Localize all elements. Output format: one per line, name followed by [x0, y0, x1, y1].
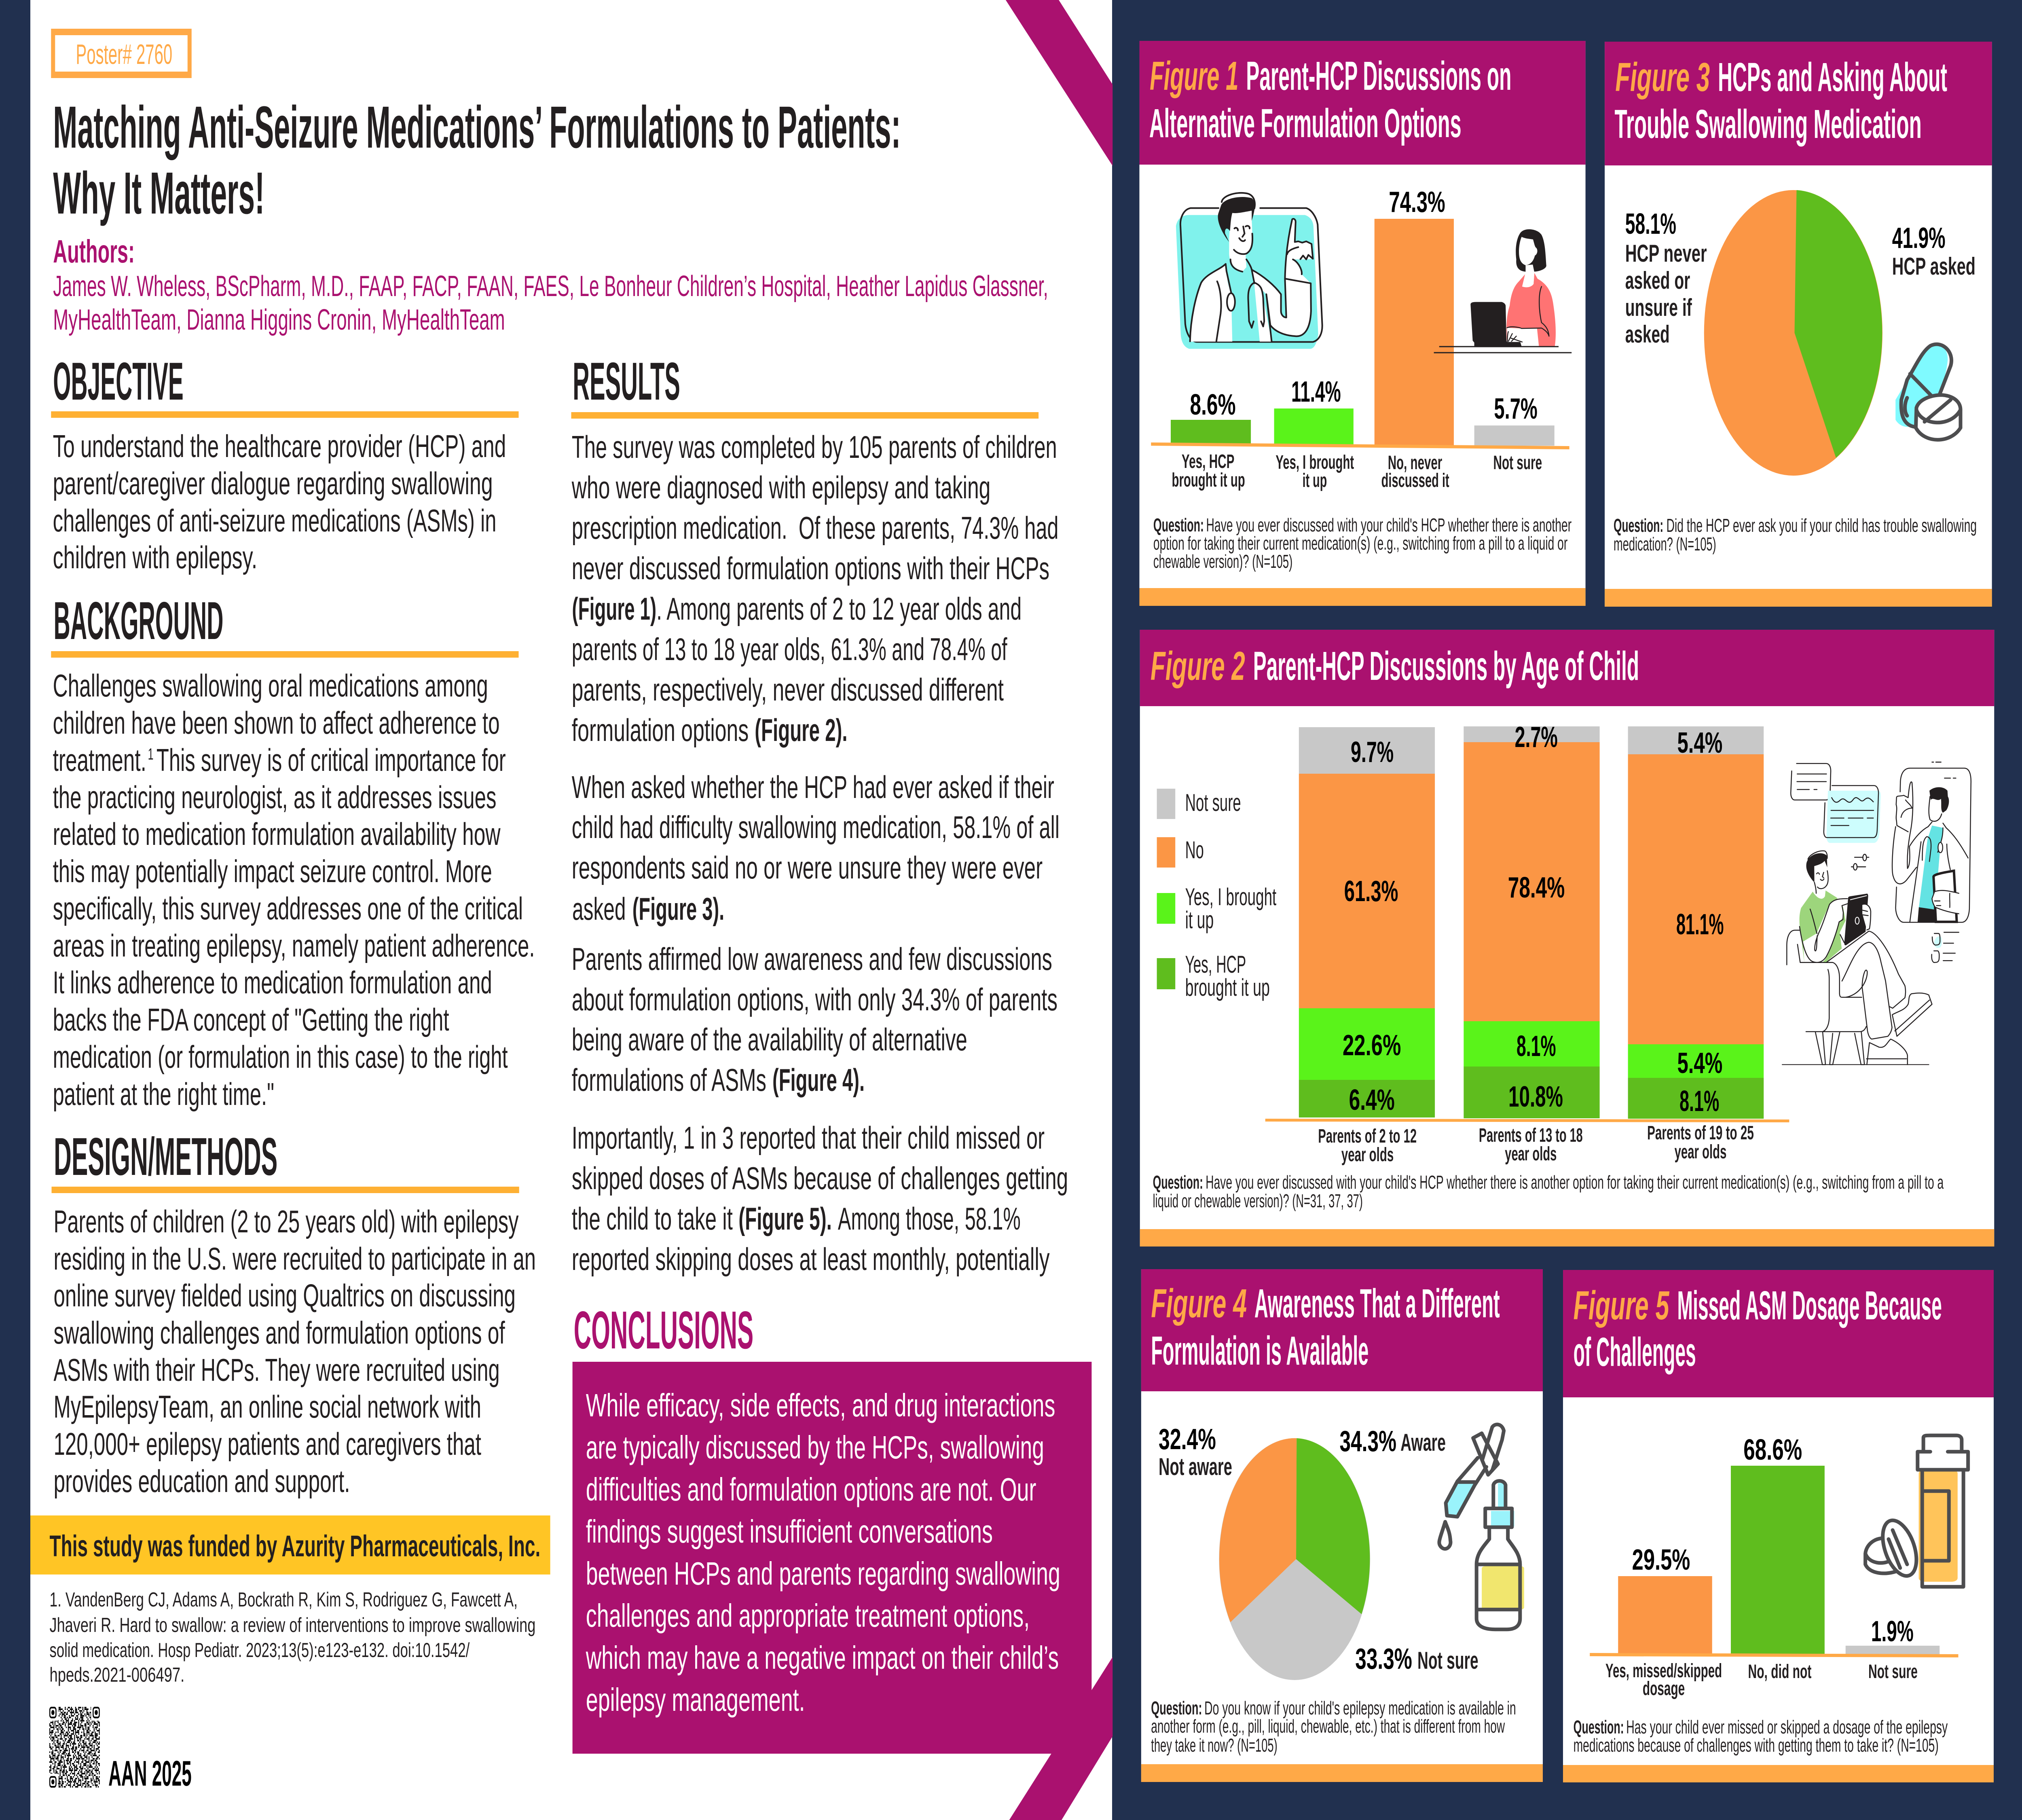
section: design and methods: ASMs with their HCPs. They were recruited using: [53, 1352, 500, 1388]
section: conclusions: [573, 1300, 1091, 1754]
bar chart: figure 1: 8.6%: [1190, 388, 1236, 421]
heading: figure 5: of Challenges: [1574, 1329, 1696, 1375]
pie labels: figure 3: unsure if: [1625, 294, 1692, 321]
stacked bar chart: figure 2: 78.4%: [1508, 871, 1565, 904]
heading: figure 2: Figure 2: [1151, 643, 1245, 689]
bar chart: figure 5: 29.5%: [1632, 1543, 1690, 1576]
section: results: formulations of ASMs: [572, 1062, 766, 1098]
bar chart: figure 1: [1151, 186, 1569, 491]
section: results: respondents said no or were unsure they were ever: [572, 850, 1043, 885]
section: results: (Figure 4).: [772, 1062, 865, 1098]
heading: figure 3: [1615, 55, 1947, 147]
question: figure 5: medications because of challenges with getting them to take it? (N=105): [1574, 1735, 1939, 1756]
section: results: the child to take it: [572, 1201, 733, 1236]
section: background: BACKGROUND: [53, 591, 223, 651]
stacked bar chart: figure 2: 6.4%: [1349, 1084, 1395, 1116]
section: background: treatment.: [53, 742, 146, 778]
section: results: never discussed formulation options with their HCPs: [572, 550, 1049, 586]
heading: figure 2: Parent-HCP Discussions by Age of Child: [1253, 643, 1639, 689]
stacked bar chart: figure 2: 5.4%: [1677, 726, 1722, 759]
bar chart: figure 1: it up: [1303, 470, 1327, 491]
section: objective: OBJECTIVE: [53, 351, 184, 411]
stacked bar chart: figure 2: year olds: [1341, 1144, 1394, 1166]
decorative corner slash: bottom: [1009, 1657, 1113, 1820]
funding banner: [30, 1515, 550, 1575]
section: background: specifically, this survey addresses one of the critical: [53, 891, 523, 926]
section: conclusions: CONCLUSIONS: [574, 1300, 753, 1360]
heading: figure 3: Figure 3: [1615, 55, 1710, 100]
bar chart: figure 1: 5.7%: [1494, 392, 1538, 425]
stacked bar chart: figure 2: 8.1%: [1516, 1030, 1556, 1062]
section: objective: To understand the healthcare provider (HCP) and: [53, 428, 506, 464]
section: design and methods: [52, 1127, 536, 1499]
section: objective: parent/caregiver dialogue regarding swallowing: [53, 466, 493, 501]
bar chart: figure 1: discussed it: [1381, 470, 1449, 491]
section: background: It links adherence to medication formulation and: [53, 965, 492, 1000]
section: results: child had difficulty swallowing medication, 58.1% of all: [572, 809, 1060, 845]
decorative corner slash: top: [1006, 0, 1113, 166]
icon: pill bottle and tablets: [1865, 1435, 1968, 1587]
question: figure 3: [1614, 515, 1977, 555]
authors: Authors:: [53, 234, 135, 270]
title: Matching Anti-Seizure Medications’ Formulations to Patients:: [53, 94, 901, 160]
pie chart: figure 3: [1704, 190, 1882, 476]
title: Why It Matters!: [53, 160, 264, 226]
question: figure 2: [1153, 1172, 1944, 1212]
authors: [53, 234, 1048, 336]
poster number badge: Poster# 2760: [76, 39, 172, 70]
section: results: who were diagnosed with epilepsy and taking: [571, 470, 990, 505]
stacked bar chart: figure 2: 81.1%: [1676, 908, 1724, 941]
bar chart: figure 5: [1590, 1433, 1958, 1699]
section: design and methods: 120,000+ epilepsy patients and caregivers that: [53, 1426, 481, 1462]
question: figure 1: option for taking their current medication(s) (e.g., switching from a pill to a liquid or: [1153, 533, 1567, 554]
section: results: (Figure 3).: [632, 891, 724, 927]
question: figure 1: [1153, 515, 1571, 572]
bar chart: figure 1: Yes, I brought: [1275, 452, 1354, 473]
reference: Jhaveri R. Hard to swallow: a review of interventions to improve swallowing: [50, 1613, 535, 1636]
question: figure 5: Question:: [1574, 1717, 1624, 1738]
stacked bar chart: figure 2: Parents of 19 to 25: [1647, 1122, 1754, 1144]
section: background: Challenges swallowing oral medications among: [53, 668, 488, 703]
bar chart: figure 5: dosage: [1643, 1678, 1685, 1699]
section: results: parents of 13 to 18 year olds, 61.3% and 78.4% of: [572, 631, 1007, 667]
legend: figure 2: Yes, HCP: [1185, 951, 1246, 978]
section: conclusions: difficulties and formulation options are not. Our: [586, 1472, 1036, 1508]
question: figure 4: Do you know if your child's epilepsy medication is available in: [1204, 1698, 1516, 1719]
question: figure 2: Question:: [1153, 1172, 1203, 1193]
section: design and methods: online survey fielded using Qualtrics on discussing: [53, 1278, 516, 1313]
stacked bar chart: figure 2: 10.8%: [1508, 1080, 1563, 1113]
pie labels: figure 4: 32.4%: [1159, 1423, 1216, 1456]
heading: figure 4: Awareness That a Different: [1254, 1281, 1500, 1326]
heading: figure 1: Figure 1: [1150, 53, 1239, 99]
section: results: asked: [572, 891, 626, 927]
question: figure 4: Question:: [1151, 1698, 1202, 1719]
heading: figure 1: Parent-HCP Discussions on: [1246, 53, 1512, 99]
pie labels: figure 3: HCP asked: [1892, 253, 1975, 280]
heading: figure 5: [1574, 1283, 1942, 1375]
stacked bar chart: figure 2: 22.6%: [1343, 1029, 1401, 1062]
question: figure 4: another form (e.g., pill, liquid, chewable, etc.) that is different from how: [1151, 1716, 1505, 1737]
section: results: [571, 351, 1068, 1277]
section: background: related to medication formulation availability how: [53, 816, 501, 852]
pie labels: figure 4: Not sure: [1417, 1647, 1478, 1674]
stacked bar chart: figure 2: 61.3%: [1344, 875, 1398, 908]
icon: dropper and liquid bottle: [1439, 1424, 1524, 1630]
bar chart: figure 5: No, did not: [1748, 1661, 1811, 1682]
section: results: prescription medication. Of these parents, 74.3% had: [572, 510, 1059, 546]
pie labels: figure 4: [1159, 1423, 1478, 1675]
section: results: Among those, 58.1%: [838, 1201, 1021, 1236]
bar chart: figure 1: No, never: [1388, 452, 1442, 474]
bar chart: figure 1: Not sure: [1493, 452, 1542, 474]
section: results: RESULTS: [573, 351, 680, 411]
section: conclusions: challenges and appropriate treatment options,: [586, 1598, 1030, 1634]
illustration: parent on sofa with telehealth doctor: [1782, 762, 1971, 1064]
question: figure 5: Has your child ever missed or skipped a dosage of the epilepsy: [1626, 1717, 1948, 1738]
pie labels: figure 3: 41.9%: [1892, 222, 1946, 254]
reference: solid medication. Hosp Pediatr. 2023;13(5):e123-e132. doi:10.1542/: [50, 1638, 470, 1661]
legend: figure 2: Not sure: [1185, 789, 1241, 816]
panel: figure 4: [1141, 1269, 1543, 1782]
section: objective: children with epilepsy.: [53, 540, 257, 575]
section: design and methods: swallowing challenges and formulation options of: [53, 1315, 505, 1350]
section: conclusions: findings suggest insufficient conversations: [586, 1514, 993, 1550]
section: results: When asked whether the HCP had ever asked if their: [572, 769, 1054, 805]
pie labels: figure 3: [1625, 207, 1975, 348]
reference: 1. VandenBerg CJ, Adams A, Bockrath R, Kim S, Rodriguez G, Fawcett A,: [50, 1588, 518, 1611]
section: background: This survey is of critical importance for: [157, 742, 506, 778]
stacked bar chart: figure 2: 8.1%: [1679, 1085, 1719, 1117]
legend: figure 2: [1157, 789, 1276, 1001]
section: results: skipped doses of ASMs because of challenges getting: [572, 1160, 1068, 1196]
section: objective: challenges of anti-seizure medications (ASMs) in: [53, 503, 497, 538]
QR code: [18, 1707, 100, 1788]
section: conclusions: which may have a negative impact on their child’s: [586, 1640, 1059, 1676]
reference: hpeds.2021-006497.: [50, 1663, 184, 1686]
bar chart: figure 1: 11.4%: [1291, 375, 1341, 408]
panel: figure 2: [1140, 630, 1994, 1246]
question: figure 1: Have you ever discussed with your child's HCP whether there is another: [1206, 515, 1571, 536]
section: background: [51, 591, 535, 1112]
section: results: being aware of the availability of alternative: [572, 1022, 967, 1057]
section: background: patient at the right time.": [53, 1076, 274, 1112]
section: background: medication (or formulation in this case) to the right: [53, 1039, 508, 1075]
panel: left text column background: [30, 0, 1112, 1820]
section: background: 1: [148, 745, 154, 764]
section: conclusions: While efficacy, side effects, and drug interactions: [586, 1388, 1055, 1424]
funding banner: This study was funded by Azurity Pharmaceuticals, Inc.: [50, 1530, 540, 1563]
section: design and methods: MyEpilepsyTeam, an online social network with: [53, 1389, 481, 1424]
poster number badge: [53, 32, 190, 75]
heading: figure 5: Figure 5: [1574, 1283, 1670, 1328]
section: design and methods: Parents of children (2 to 25 years old) with epilepsy: [53, 1204, 519, 1239]
icon: doctor pointing up: [1176, 193, 1571, 353]
section: results: formulation options: [572, 712, 749, 748]
question: figure 1: chewable version)? (N=105): [1153, 551, 1292, 572]
bar chart: figure 1: brought it up: [1172, 470, 1245, 491]
section: conclusions: between HCPs and parents regarding swallowing: [586, 1556, 1060, 1592]
question: figure 1: Question:: [1153, 515, 1204, 536]
heading: figure 4: Formulation is Available: [1151, 1328, 1368, 1373]
pie labels: figure 3: 58.1%: [1625, 207, 1676, 240]
heading: figure 2: [1151, 643, 1639, 689]
section: results: . Among parents of 2 to 12 year olds and: [656, 591, 1022, 626]
section: conclusions: are typically discussed by the HCPs, swallowing: [586, 1430, 1044, 1466]
bar chart: figure 1: 74.3%: [1389, 186, 1445, 218]
panel: figure 3: [1605, 42, 1992, 607]
meeting label: AAN 2025: [108, 1754, 192, 1793]
section: results: reported skipping doses at least monthly, potentially: [572, 1241, 1050, 1277]
legend: figure 2: brought it up: [1185, 974, 1270, 1001]
title: [53, 94, 901, 226]
section: results: Parents affirmed low awareness and few discussions: [572, 941, 1052, 977]
section: background: areas in treating epilepsy, namely patient adherence.: [53, 928, 535, 963]
section: design and methods: residing in the U.S. were recruited to participate in an: [53, 1241, 536, 1276]
stacked bar chart: figure 2: Parents of 13 to 18: [1479, 1125, 1583, 1146]
panel: figure 1: [1140, 41, 1586, 606]
pie labels: figure 3: asked or: [1625, 267, 1690, 294]
pie labels: figure 3: asked: [1625, 321, 1670, 348]
authors: James W. Wheless, BScPharm, M.D., FAAP, FACP, FAAN, FAES, Le Bonheur Children’s Hospital, Heather Lapidus Glassner,: [53, 270, 1048, 303]
question: figure 3: medication? (N=105): [1614, 534, 1716, 555]
stacked bar chart: figure 2: 2.7%: [1515, 721, 1558, 753]
pie labels: figure 4: 33.3%: [1355, 1642, 1412, 1675]
section: background: this may potentially impact seizure control. More: [53, 853, 492, 889]
stacked bar chart: figure 2: year olds: [1675, 1141, 1726, 1163]
section: results: (Figure 2).: [755, 712, 848, 748]
pie labels: figure 4: Not aware: [1159, 1453, 1232, 1480]
stacked bar chart: figure 2: [1265, 721, 1789, 1166]
authors: MyHealthTeam, Dianna Higgins Cronin, MyHealthTeam: [53, 303, 505, 336]
question: figure 5: [1574, 1717, 1948, 1756]
stacked bar chart: figure 2: year olds: [1505, 1143, 1557, 1165]
heading: figure 1: [1149, 53, 1512, 146]
section: background: the practicing neurologist, as it addresses issues: [53, 779, 497, 815]
panel: figure 5: [1563, 1270, 1994, 1782]
legend: figure 2: Yes, I brought: [1185, 883, 1276, 910]
stacked bar chart: figure 2: 5.4%: [1677, 1047, 1722, 1079]
bar chart: figure 5: 68.6%: [1743, 1433, 1802, 1466]
heading: figure 3: HCPs and Asking About: [1718, 55, 1947, 100]
pie labels: figure 3: HCP never: [1625, 240, 1707, 267]
section: results: Importantly, 1 in 3 reported that their child missed or: [572, 1120, 1045, 1155]
legend: figure 2: No: [1185, 836, 1204, 863]
question: figure 2: liquid or chewable version)? (N=31, 37, 37): [1153, 1191, 1363, 1212]
section: results: The survey was completed by 105 parents of children: [572, 429, 1057, 465]
legend: figure 2: it up: [1185, 906, 1214, 933]
pie labels: figure 4: 34.3%: [1339, 1425, 1396, 1458]
heading: figure 1: Alternative Formulation Options: [1149, 101, 1462, 146]
stacked bar chart: figure 2: Parents of 2 to 12: [1318, 1126, 1417, 1147]
question: figure 4: [1151, 1698, 1516, 1756]
icon: capsule and tablet: [1895, 344, 1961, 440]
question: figure 3: Did the HCP ever ask you if your child has trouble swallowing: [1667, 515, 1977, 536]
question: figure 3: Question:: [1614, 515, 1663, 536]
bar chart: figure 1: Yes, HCP: [1182, 451, 1234, 472]
section: design and methods: provides education and support.: [53, 1463, 350, 1499]
bar chart: figure 5: 1.9%: [1871, 1615, 1914, 1648]
heading: figure 4: [1151, 1281, 1500, 1373]
section: background: backs the FDA concept of "Getting the right: [53, 1002, 449, 1037]
reference: [50, 1588, 535, 1686]
pie labels: figure 4: Aware: [1400, 1429, 1446, 1456]
section: conclusions: epilepsy management.: [586, 1682, 805, 1718]
section: results: about formulation options, with only 34.3% of parents: [572, 982, 1058, 1017]
section: results: (Figure 1): [572, 591, 656, 626]
pie chart: figure 4: [1219, 1438, 1370, 1680]
question: figure 2: Have you ever discussed with your child's HCP whether there is another option for taking their current medication(s) (e.g., switching from a pill to a: [1206, 1172, 1944, 1193]
heading: figure 4: Figure 4: [1151, 1281, 1247, 1326]
section: results: (Figure 5).: [738, 1201, 832, 1236]
heading: figure 3: Trouble Swallowing Medication: [1615, 102, 1922, 147]
section: results: parents, respectively, never discussed different: [572, 672, 1004, 707]
section: objective: [51, 351, 518, 575]
stacked bar chart: figure 2: 9.7%: [1351, 736, 1394, 768]
bar chart: figure 5: Not sure: [1868, 1661, 1918, 1682]
bar chart: figure 5: Yes, missed/skipped: [1605, 1660, 1722, 1682]
section: design and methods: DESIGN/METHODS: [54, 1127, 277, 1187]
question: figure 4: they take it now? (N=105): [1151, 1735, 1277, 1756]
section: background: children have been shown to affect adherence to: [53, 705, 500, 741]
